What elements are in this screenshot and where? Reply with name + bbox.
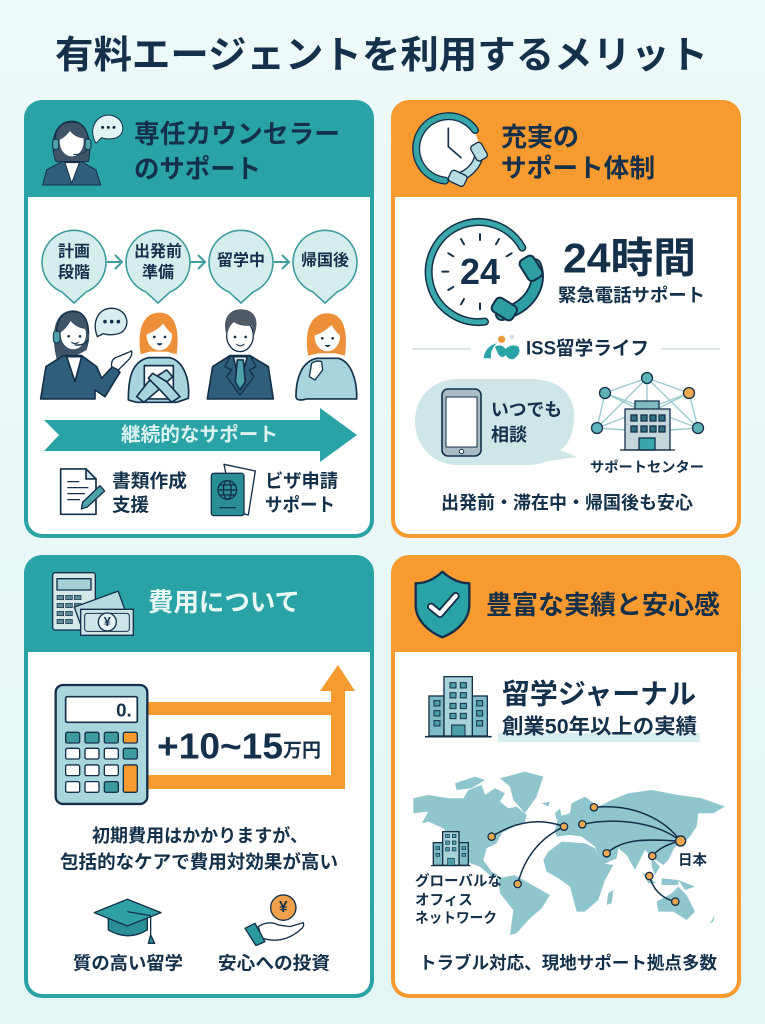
title: 有料エージェントを利用するメリット [55,35,708,77]
arrow: cost increase [147,665,355,789]
person: student with document [128,313,189,402]
icon: calculator [56,685,147,804]
icon: graduation cap [94,899,161,943]
icon: office buildings [425,677,492,737]
text: cost effectiveness: 初期費用はかかりますが、 [92,825,308,846]
icon: calculator: 0. [116,699,132,720]
panel: support system [391,100,741,538]
bubble: after return [293,230,357,303]
label: investment: 安心への投資 [218,952,330,974]
icon: counselor with speech bubble [43,115,123,185]
logo: ISS: ISS留学ライフ [526,336,649,360]
icon: smartphone [442,389,481,456]
heading: counselor [134,119,340,184]
icon: hand with yen coin: ¥ [279,899,288,916]
heading: track record: 豊富な実績と安心感 [486,590,720,620]
arrow: continuous support [44,408,357,462]
world map with route lines [413,772,725,935]
callout: consult anytime [415,379,577,465]
text: local support: トラブル対応、現地サポート拠点多数 [419,953,717,973]
heading: support system: サポート体制 [501,154,655,183]
label: quality study: 質の高い留学 [73,952,183,974]
person: man in suit [207,309,273,399]
label: global office network: グローバルな [415,872,502,890]
icon: passport [211,464,255,516]
bubble: planning: 段階 [58,264,90,282]
text: peace of mind: 出発前・滞在中・帰国後も安心 [441,492,693,513]
arrow [107,255,122,269]
icon: small office building [431,832,470,866]
label: Japan: 日本 [678,852,707,869]
arrow [190,255,205,269]
label: global office network: オフィス [415,892,473,909]
icon: 24 hour clock with phone: 24 [460,251,500,292]
figure: additional cost: +10~15 [157,726,283,766]
callout: consult anytime: いつでも [491,400,562,420]
heading: support system: 充実の [501,122,579,152]
bubble: planning: 計画 [58,242,90,260]
label: global office network [415,872,502,927]
people illustration [41,308,357,402]
panel: track record [391,555,741,998]
icon: hand with yen coin [245,895,304,946]
big number: 24 hours [558,234,705,306]
bubble: planning [42,230,106,303]
big number: 24 hours: 24時間 [563,234,696,282]
text: cost effectiveness: 包括的なケアで費用対効果が高い [60,852,338,872]
icon: 24 hour clock with phone [429,222,544,322]
text: document support: 書類作成 [112,470,187,492]
person: returnee [296,313,357,400]
arrow: continuous support: 継続的なサポート [121,424,278,446]
icon: clock and phone [416,116,489,187]
text: cost effectiveness [60,825,338,872]
label: global office network: ネットワーク [415,910,497,927]
icon: calculator and bills [53,573,133,635]
panel: cost [24,555,374,998]
icon: calculator and bills: ¥ [104,615,111,629]
icon: document and pen [61,469,105,514]
arrow [274,255,289,269]
figure: additional cost: 万円 [283,740,321,762]
bubble: after return: 帰国後 [301,250,349,270]
label: support center: サポートセンター [590,459,704,476]
bubble: pre-departure: 準備 [142,262,174,282]
heading: Ryugaku Journal: 創業50年以上の実績 [502,716,697,738]
bubble: studying abroad [209,230,273,303]
logo: ISS [412,335,720,360]
person: counselor [41,308,132,399]
text: visa support: サポート [265,494,335,516]
icon: support center network [592,372,704,450]
route lines [492,807,681,902]
heading: counselor: 専任カウンセラー [134,119,340,149]
heading: Ryugaku Journal [498,678,700,742]
text: document support: 支援 [112,494,150,516]
text: visa support [265,470,338,516]
bubble: pre-departure: 出発前 [134,242,182,260]
map: continents [413,772,725,935]
callout: consult anytime: 相談 [491,425,527,445]
bubble: studying abroad: 留学中 [217,250,265,270]
icon: shield with check [416,572,469,637]
heading: counselor: のサポート [134,154,261,184]
bubble: pre-departure [126,230,190,303]
heading: cost: 費用について [148,589,300,617]
heading: Ryugaku Journal: 留学ジャーナル [502,678,696,710]
panel: dedicated counselor support [24,100,374,538]
heading: support system [501,122,655,183]
big number: 24 hours: 緊急電話サポート [558,284,705,306]
text: document support [112,470,187,516]
text: visa support: ビザ申請 [265,470,338,492]
stage bubbles [42,230,357,303]
office markers [488,804,686,905]
